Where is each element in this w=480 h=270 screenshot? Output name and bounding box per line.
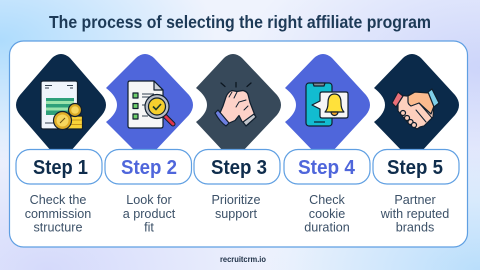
panel: steps <box>10 41 468 247</box>
diamond: step 5 <box>374 54 459 162</box>
title: The process of selecting the right affiliate program <box>49 12 431 32</box>
step 2 description: fit <box>144 220 154 234</box>
icon: clasped hands <box>215 82 256 126</box>
step 4 description: duration <box>304 220 350 234</box>
step 1 description: Check the <box>30 193 86 207</box>
diamond: step 4 <box>285 54 370 162</box>
step 1 description: structure <box>34 220 82 234</box>
diamond: step 2 <box>106 54 193 162</box>
step 4 description: Check <box>309 193 346 207</box>
step 1 label <box>16 150 102 184</box>
diamond: step 3 <box>196 54 281 162</box>
diamond: step 1 <box>16 54 106 163</box>
step 3 description: Prioritize <box>212 193 260 207</box>
step 2 label <box>105 150 192 184</box>
step 1 description: commission <box>25 207 91 221</box>
step 3 label <box>194 150 280 184</box>
step 5 label <box>373 150 459 184</box>
step 2 description: a product <box>123 207 176 221</box>
step 1 label: Step 1 <box>33 157 88 179</box>
icon: handshake <box>392 89 439 129</box>
step 2 description: Look for <box>126 193 172 207</box>
step 5 description: Partner <box>394 193 436 207</box>
step 4 label: Step 4 <box>298 157 356 179</box>
step 3 label: Step 3 <box>211 157 267 179</box>
step 4 label <box>284 150 370 184</box>
icon: phone with bell notification <box>306 83 348 126</box>
step 5 label: Step 5 <box>387 157 443 179</box>
icon: commission document with coins <box>41 81 82 130</box>
step 5 description: with reputed <box>380 207 449 221</box>
step 5 description: brands <box>396 220 434 234</box>
step 2 label: Step 2 <box>121 157 177 179</box>
footer: source: recruitcrm.io <box>220 254 266 264</box>
icon: document with magnifier <box>128 81 173 128</box>
step 4 description: cookie <box>309 207 345 221</box>
step 3 description: support <box>215 207 257 221</box>
